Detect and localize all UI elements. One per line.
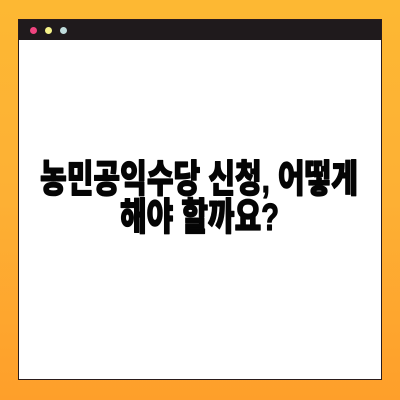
icon: yellow window dot bbox=[45, 27, 52, 34]
title: 해야 할까요? bbox=[120, 197, 279, 239]
icon: pink window dot bbox=[30, 27, 37, 34]
window title bar bbox=[19, 20, 381, 40]
icon: pale blue window dot bbox=[60, 27, 67, 34]
